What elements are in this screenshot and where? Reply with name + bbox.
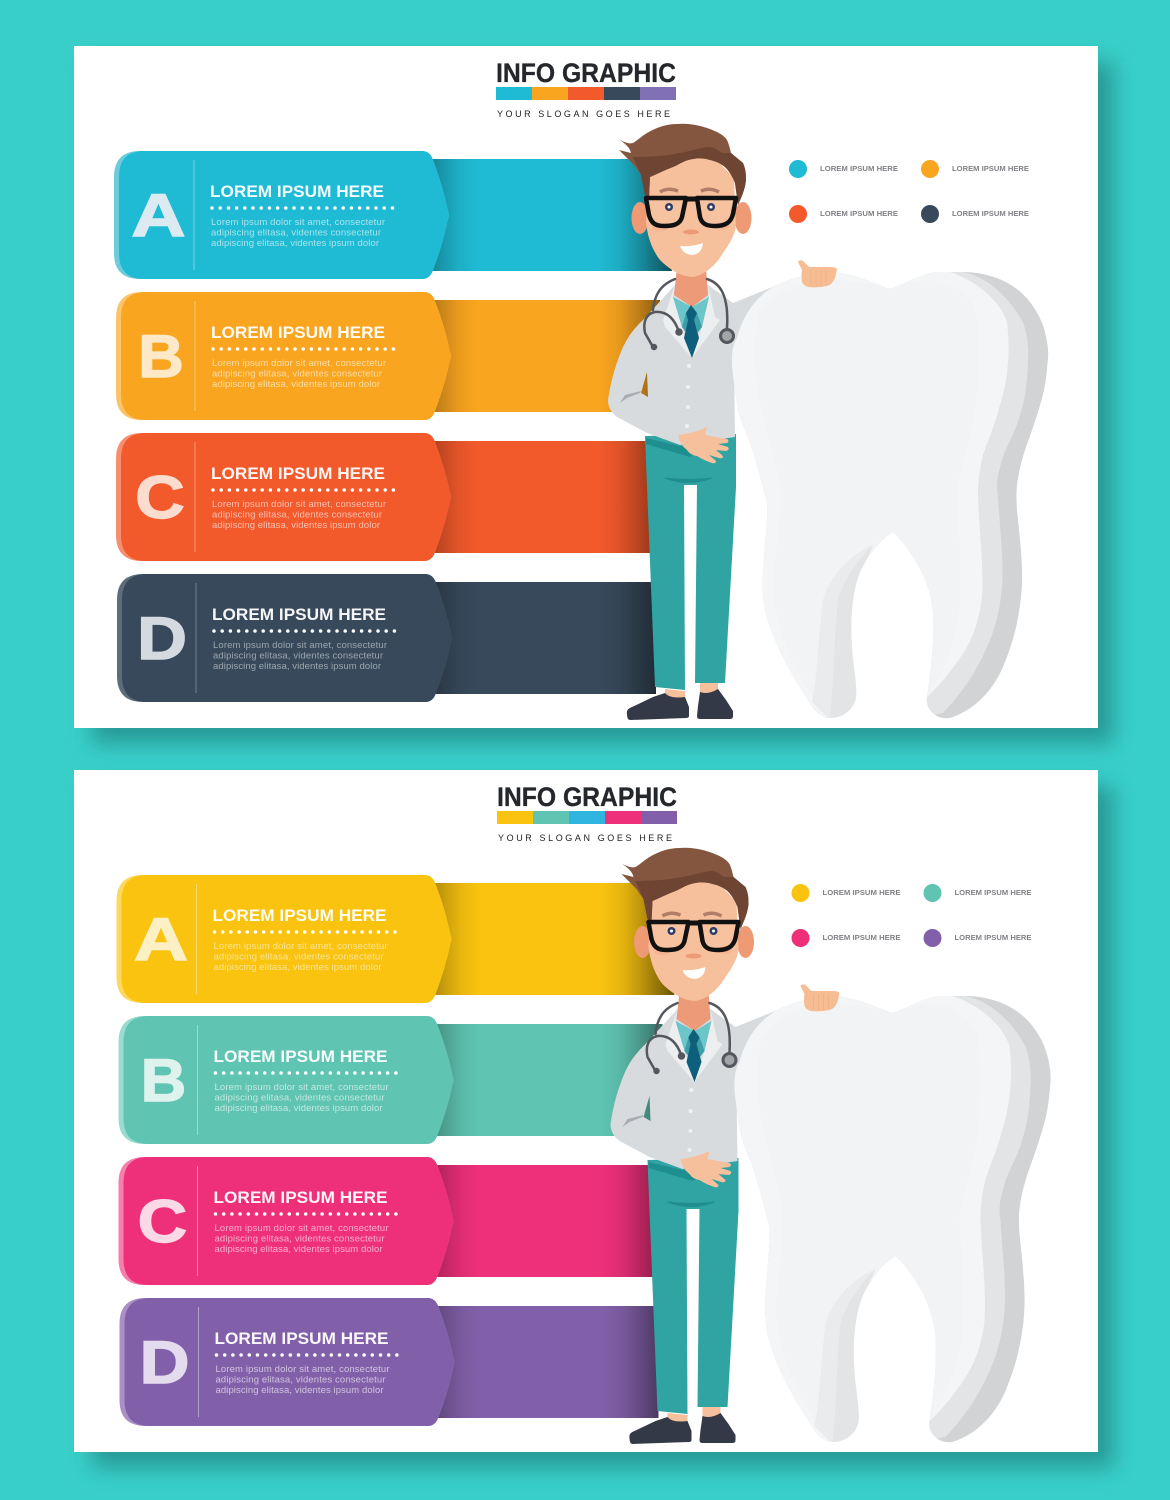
panel shadow: bottom [92, 786, 1114, 1468]
lab coat [608, 282, 785, 445]
title 2: INFO GRAPHIC [497, 782, 677, 812]
tie [684, 305, 699, 358]
card A yellow: adipiscing elitasa, videntes ipsum dolor [214, 962, 382, 973]
card C: adipiscing elitasa, videntes ipsum dolor [212, 520, 380, 531]
doctor and tooth illustration 2 [610, 848, 1051, 1484]
title: INFO GRAPHIC [496, 58, 676, 88]
card C [116, 433, 451, 561]
card B: B [138, 323, 184, 391]
card A: LOREM IPSUM HERE [210, 182, 384, 201]
colour strip [496, 87, 676, 100]
card C pink: C [138, 1188, 187, 1255]
card D purple: adipiscing elitasa, videntes ipsum dolor [216, 1385, 384, 1396]
bar D purple [436, 1306, 658, 1418]
card A: adipiscing elitasa, videntes ipsum dolor [211, 238, 379, 249]
card D: D [137, 604, 187, 672]
shirt collar [673, 297, 709, 340]
hair [619, 124, 746, 205]
panel shadow: top [92, 62, 1114, 744]
card D purple: LOREM IPSUM HERE [214, 1329, 388, 1348]
legend: LOREM IPSUM HERE [952, 209, 1029, 218]
legend 2: LOREM IPSUM HERE [822, 933, 900, 942]
bar A yellow [432, 883, 674, 995]
card D purple: adipiscing elitasa, videntes consectetur [216, 1374, 386, 1386]
face [646, 153, 736, 277]
slogan: YOUR SLOGAN GOES HERE [497, 109, 670, 119]
card B teal: Lorem ipsum dolor sit amet, consectetur [214, 1082, 388, 1093]
glasses [646, 198, 736, 226]
legend 2: LOREM IPSUM HERE [954, 933, 1032, 942]
tooth [700, 200, 1048, 760]
coat sleeve crease [620, 391, 641, 403]
card C pink: adipiscing elitasa, videntes consectetur [214, 1234, 384, 1244]
card D [117, 574, 452, 702]
legend 2: LOREM IPSUM HERE [822, 888, 900, 897]
eyebrows [660, 189, 719, 192]
legend 2 [792, 884, 1032, 947]
card C pink: Lorem ipsum dolor sit amet, consectetur [214, 1223, 388, 1234]
smile [680, 243, 703, 255]
card A: adipiscing elitasa, videntes consectetur [211, 228, 381, 238]
ankles [665, 683, 718, 699]
card C pink: LOREM IPSUM HERE [214, 1188, 388, 1207]
card B: adipiscing elitasa, videntes ipsum dolor [212, 379, 380, 390]
card B teal: adipiscing elitasa, videntes ipsum dolor [214, 1103, 382, 1114]
card A yellow: LOREM IPSUM HERE [212, 906, 386, 925]
card D purple: Lorem ipsum dolor sit amet, consectetur [216, 1364, 390, 1375]
bar B teal [434, 1024, 662, 1136]
hand on tooth [798, 260, 837, 287]
coat buttons [685, 364, 691, 428]
card C pink: adipiscing elitasa, videntes ipsum dolor [214, 1244, 382, 1255]
card A yellow: A [134, 907, 188, 973]
card A [114, 151, 449, 279]
card A: Lorem ipsum dolor sit amet, consectetur [211, 217, 385, 228]
bar B [432, 300, 660, 412]
legend: LOREM IPSUM HERE [820, 209, 898, 218]
card B teal: B [141, 1047, 186, 1115]
bar C [432, 441, 650, 553]
card B teal [118, 1016, 454, 1144]
card C: Lorem ipsum dolor sit amet, consectetur [212, 499, 386, 510]
card B [116, 292, 451, 420]
doctor and tooth illustration [608, 124, 1048, 760]
card B teal: adipiscing elitasa, videntes consectetur [214, 1092, 384, 1104]
legend [789, 160, 1029, 223]
card B: Lorem ipsum dolor sit amet, consectetur [212, 358, 386, 369]
card C: adipiscing elitasa, videntes consectetur [212, 510, 382, 520]
legend: LOREM IPSUM HERE [952, 164, 1029, 173]
card D: adipiscing elitasa, videntes ipsum dolor [213, 661, 381, 672]
slogan 2: YOUR SLOGAN GOES HERE [498, 833, 672, 843]
ears [632, 202, 752, 234]
card A yellow: Lorem ipsum dolor sit amet, consectetur [214, 941, 388, 952]
card B teal: LOREM IPSUM HERE [214, 1047, 388, 1066]
shoes [627, 689, 733, 720]
card A: A [131, 183, 186, 249]
colour strip 2 [497, 811, 677, 824]
cheeks [652, 222, 730, 232]
panel: top infographic [74, 46, 1098, 760]
stethoscope [644, 279, 734, 349]
pants [645, 434, 736, 690]
card B: adipiscing elitasa, videntes consectetur [212, 368, 382, 380]
card C: LOREM IPSUM HERE [211, 464, 385, 483]
card D: LOREM IPSUM HERE [212, 605, 386, 624]
card D purple [120, 1298, 454, 1426]
card A yellow [116, 875, 452, 1003]
bar C pink [434, 1165, 652, 1277]
legend 2: LOREM IPSUM HERE [954, 888, 1032, 897]
lapels [663, 285, 720, 358]
bar D [433, 582, 656, 694]
legend: LOREM IPSUM HERE [820, 164, 898, 173]
card D: Lorem ipsum dolor sit amet, consectetur [213, 640, 387, 651]
neck [674, 268, 708, 307]
card C pink [118, 1157, 454, 1285]
eyes [665, 203, 715, 211]
card D purple: D [140, 1328, 189, 1396]
card B: LOREM IPSUM HERE [211, 323, 385, 342]
hand on belly [678, 427, 729, 463]
bar A [430, 159, 672, 271]
card C: C [135, 464, 185, 531]
nose [683, 230, 699, 234]
card A yellow: adipiscing elitasa, videntes consectetur [214, 952, 384, 962]
card D: adipiscing elitasa, videntes consectetur [213, 650, 383, 662]
panel: bottom infographic [74, 770, 1098, 1484]
